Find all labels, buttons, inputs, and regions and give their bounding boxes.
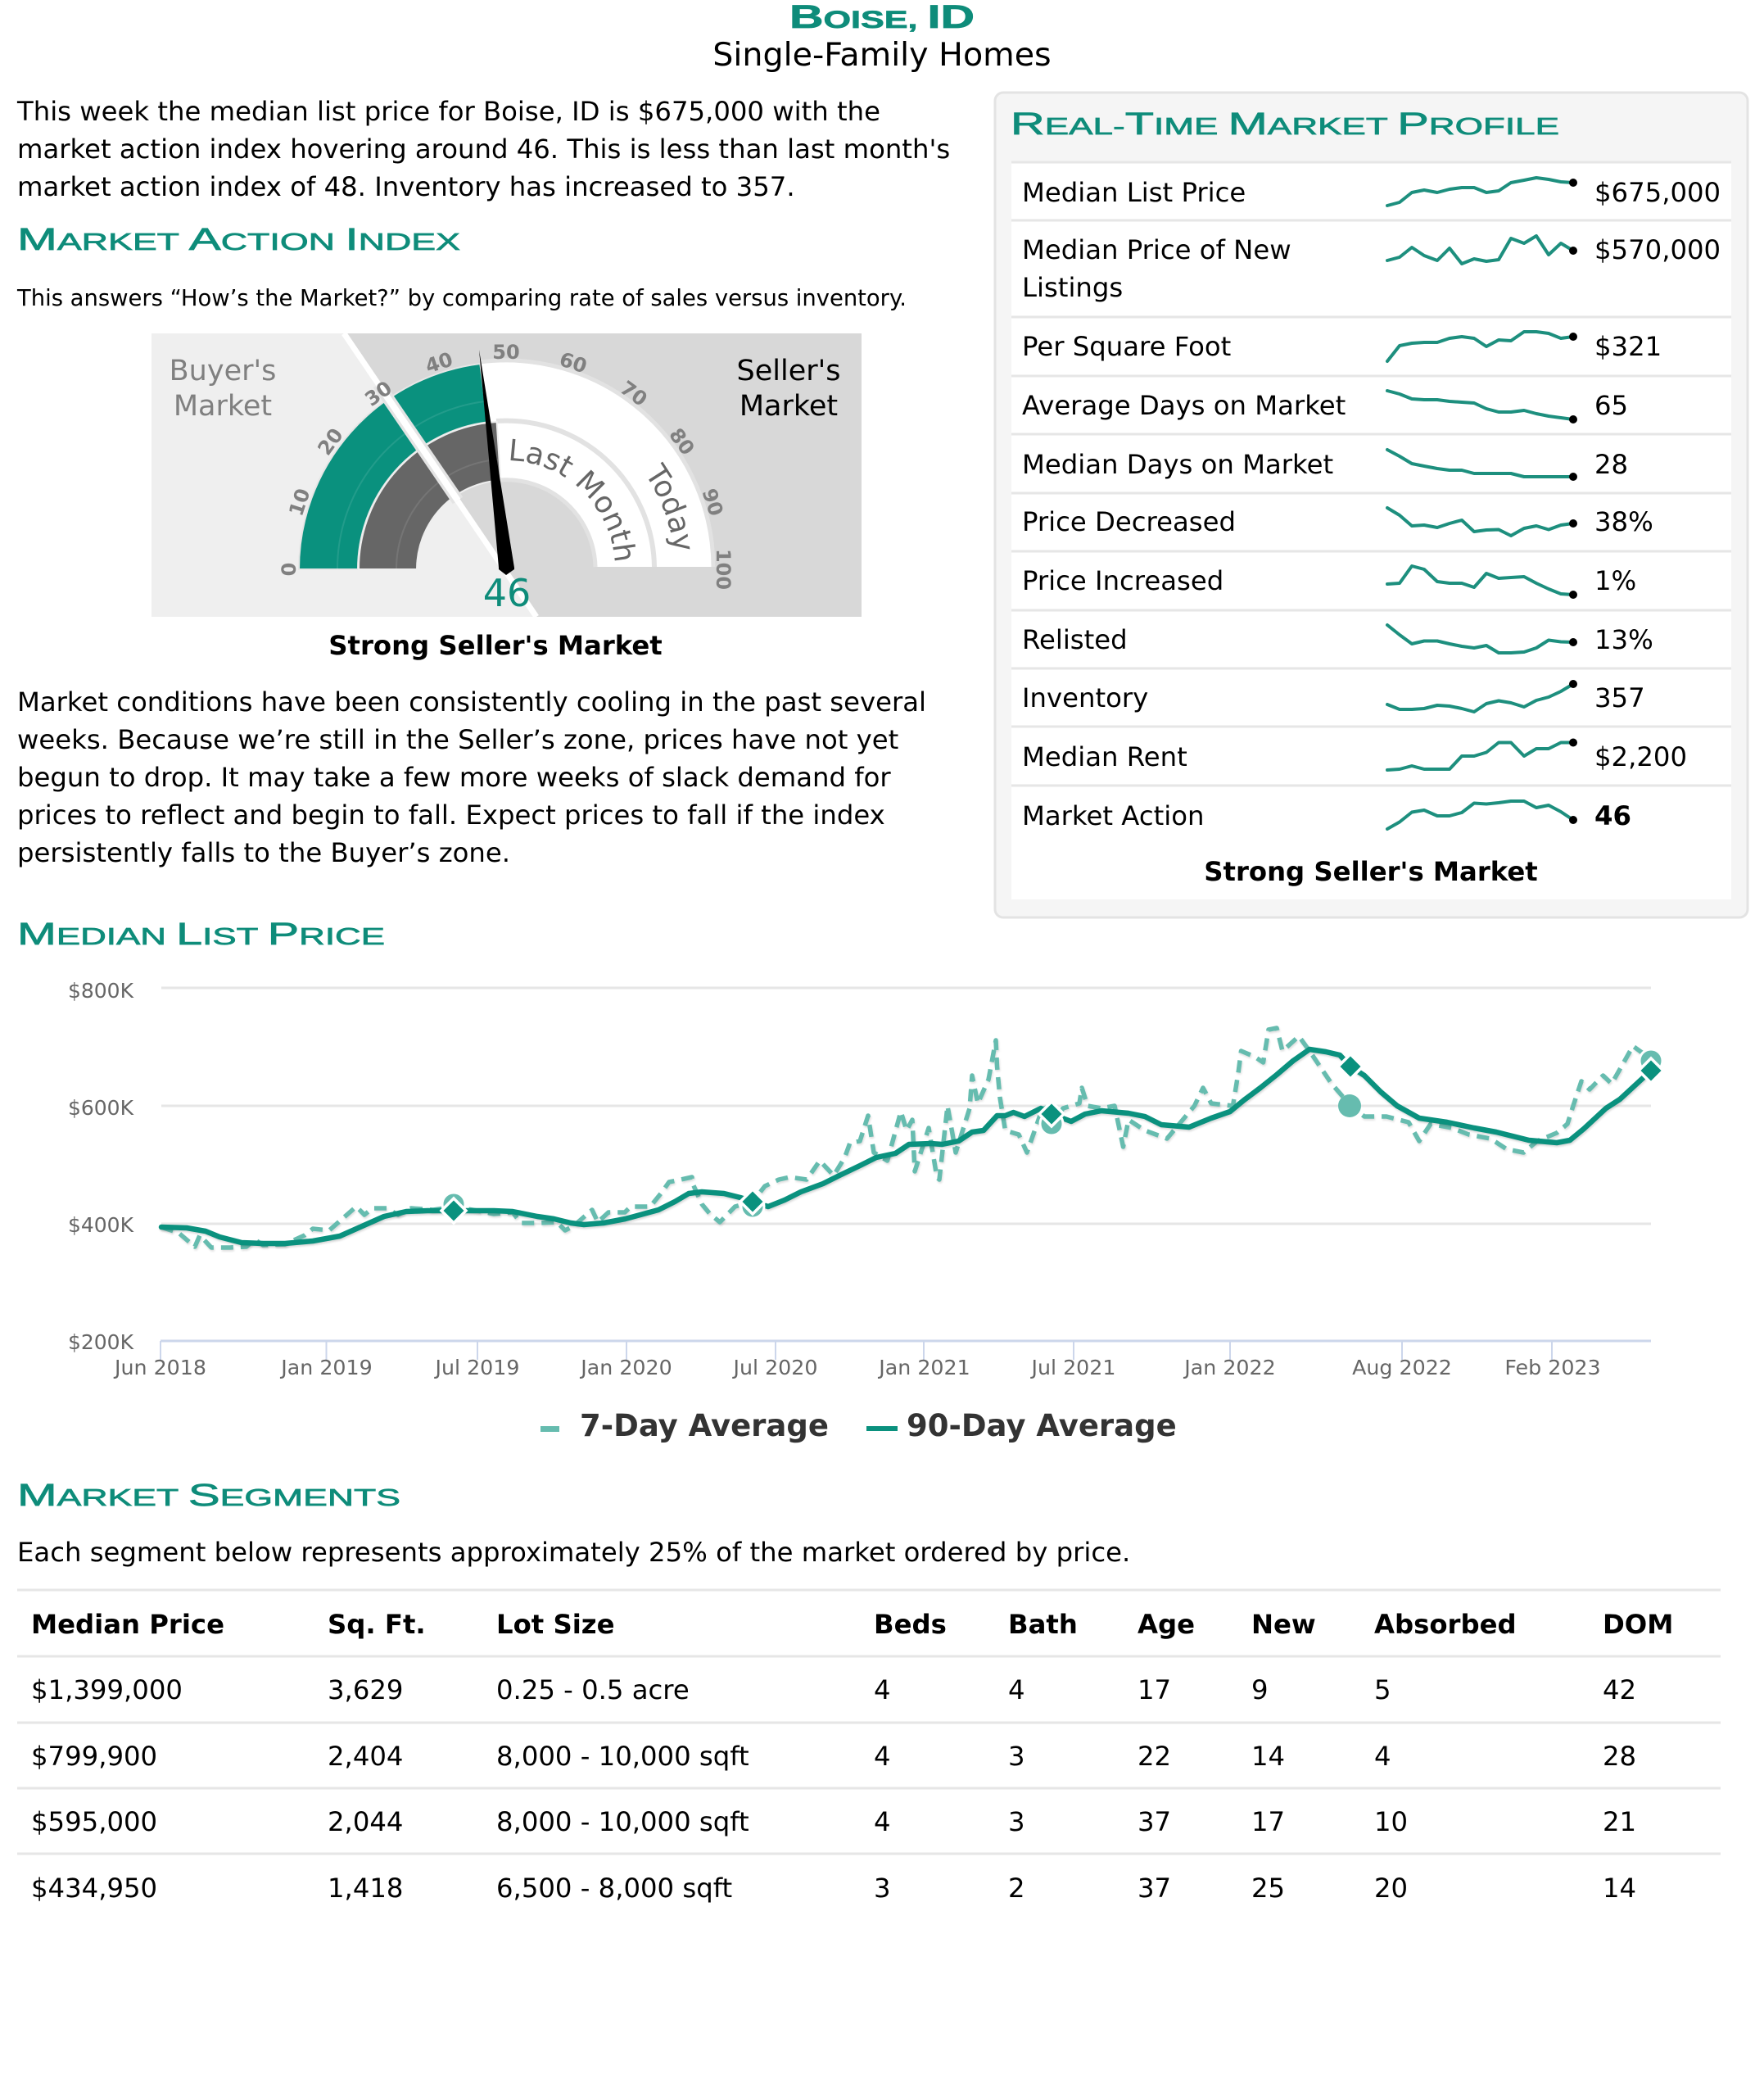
table header: Absorbed [1374,1609,1517,1640]
table row 1: 42 [1603,1674,1636,1705]
table row 1 [31,1674,1636,1705]
x axis ticks and labels: Jul 2019 [434,1356,519,1379]
table row 1: 9 [1251,1674,1269,1705]
table row 2: $799,900 [31,1741,157,1772]
chart legend: 90-Day Average [907,1408,1177,1443]
markers: 7-day circles [442,1049,1662,1218]
title: Single-Family Homes [712,36,1052,74]
row: market action: 46 [1594,800,1631,831]
table row 2: 4 [874,1741,891,1772]
gauge: scale ticks: 0 [278,563,301,576]
table row 1: $1,399,000 [31,1674,183,1705]
gauge: scale ticks: 70 [616,376,652,411]
table row 2 [31,1741,1636,1772]
gauge: band labels [511,439,690,560]
market segments description: Each segment below represents approximately 25% of the market ordered by price. [17,1537,1130,1568]
row: median days on market: 28 [1594,449,1628,480]
gauge: band labels: Today [649,462,690,549]
gauge: buyer's market label: Buyer's [170,355,276,387]
row: market action [1022,800,1631,831]
table row 3: 37 [1138,1806,1171,1837]
gauge: market action index [152,333,862,617]
gauge: scale ticks: 90 [698,486,728,519]
table row 4: 37 [1138,1873,1171,1904]
heading: market segments: M ARKET S EGMENTS [17,1479,400,1513]
gauge: seller's market label: Market [740,390,838,423]
table header: Age [1138,1609,1195,1640]
x axis ticks and labels: Jun 2018 [113,1356,206,1379]
table row 1: 5 [1374,1674,1391,1705]
row: price increased [1022,565,1636,599]
table row 3: 8,000 - 10,000 sqft [496,1806,749,1837]
panel verdict: Strong Seller's Market [1204,856,1538,887]
table row 4: 20 [1374,1873,1408,1904]
x axis ticks and labels: Jan 2020 [579,1356,672,1379]
row: average days on market [1022,390,1628,423]
row: median price of new listings: $570,000 [1594,234,1721,265]
intro paragraph: market action index of 48. Inventory has increased to 357. [17,171,795,202]
x axis ticks and labels: Jan 2022 [1183,1356,1276,1379]
markers: 90-day diamonds [441,1054,1663,1223]
row: relisted: 13% [1594,624,1653,655]
x axis ticks and labels: Jan 2021 [877,1356,970,1379]
gauge: scale ticks [278,341,735,590]
gauge: scale ticks: 40 [423,347,455,378]
x axis ticks and labels: Jul 2020 [732,1356,817,1379]
table header: Median Price [31,1609,224,1640]
x axis ticks and labels: Feb 2023 [1504,1356,1601,1379]
table row 4 [31,1873,1636,1904]
gauge: value: 46 [483,571,531,615]
heading: market action index: M ARKET A CTION INDEX [17,223,460,257]
table header: Bath [1008,1609,1078,1640]
gauge: scale ticks: 10 [284,486,314,519]
table row 3: $595,000 [31,1806,157,1837]
gauge: scale ticks: 20 [313,423,348,460]
gauge: scale ticks: 30 [360,376,396,411]
gauge: scale ticks: 50 [492,341,520,364]
panel heading: R EAL- T IME M ARKET P ROFILE [1011,107,1559,142]
table row 2: 22 [1138,1741,1171,1772]
row: price decreased [1022,506,1653,537]
series: 7-day average [161,1028,1651,1248]
table header: Lot Size [496,1609,614,1640]
gauge: scale ticks: 60 [557,347,590,378]
row: price decreased: Price Decreased [1022,506,1236,537]
gauge: buyer's market label [170,355,276,423]
table row 4: $434,950 [31,1873,157,1904]
y axis labels: $600K [68,1096,134,1120]
y axis labels [68,979,134,1354]
intro paragraph [16,96,950,202]
y axis labels: $200K [68,1330,134,1354]
table row 3: 21 [1603,1806,1636,1837]
intro paragraph: market action index hovering around 46. This is less than last month's [17,134,950,165]
x axis ticks and labels: Jul 2021 [1030,1356,1115,1379]
gauge: seller's market label: Seller's [737,355,840,387]
table row 3: 4 [874,1806,891,1837]
chart legend: 7-Day Average [580,1408,829,1443]
table row 3: 3 [1008,1806,1025,1837]
table row 1: 3,629 [328,1674,403,1705]
x axis ticks and labels: Aug 2022 [1352,1356,1452,1379]
table row 2: 4 [1374,1741,1391,1772]
table: market segments [17,1590,1721,1904]
market conditions paragraph [17,686,926,868]
table row 2: 3 [1008,1741,1025,1772]
table header: Beds [874,1609,947,1640]
row: per square foot: Per Square Foot [1022,331,1231,362]
panel: real-time market profile [995,93,1748,917]
market conditions paragraph: weeks. Because we’re still in the Seller’s zone, prices have not yet [17,724,898,755]
table row 1: 0.25 - 0.5 acre [496,1674,690,1705]
gauge: white ring [480,360,713,567]
table row 2: 14 [1251,1741,1285,1772]
y axis labels: $400K [68,1213,134,1237]
row: market action: Market Action [1022,800,1204,831]
table row 3: 2,044 [328,1806,403,1837]
row: median days on market [1022,449,1628,481]
row: median list price: Median List Price [1022,177,1246,208]
table header: Sq. Ft. [328,1609,426,1640]
x axis ticks and labels [113,1341,1601,1379]
market conditions paragraph: prices to reflect and begin to fall. Expect prices to fall if the index [17,799,885,831]
x axis ticks and labels: Jan 2019 [279,1356,373,1379]
table header: DOM [1603,1609,1673,1640]
row: average days on market: 65 [1594,390,1628,421]
row: price increased: 1% [1594,565,1636,596]
table row 2: 8,000 - 10,000 sqft [496,1741,749,1772]
gauge: seller's market label [737,355,840,423]
row: median rent: $2,200 [1594,741,1687,772]
row: median rent: Median Rent [1022,741,1187,772]
table row 1: 4 [874,1674,891,1705]
line chart: median list price [68,979,1663,1379]
table header: New [1251,1609,1316,1640]
gauge: last month band [359,422,500,569]
heading: median list price: M EDIAN L IST P RICE [17,917,385,952]
row: inventory: 357 [1594,682,1645,713]
title: B OISE, ID [789,0,975,35]
row: average days on market: Average Days on Market [1022,390,1346,421]
row: inventory: Inventory [1022,682,1148,713]
row: median rent [1022,739,1687,772]
gauge: band labels: Last Month [511,439,635,560]
row: median days on market: Median Days on Market [1022,449,1333,480]
table row 2: 28 [1603,1741,1636,1772]
table row 3 [31,1806,1636,1837]
gauge: scale ticks: 100 [712,549,735,590]
market conditions paragraph: persistently falls to the Buyer’s zone. [17,837,510,868]
gauge: today band [299,364,487,569]
y axis labels: $800K [68,979,134,1003]
table header [31,1609,1673,1640]
row: median price of new listings [1022,234,1721,303]
gauge: scale ticks: 80 [664,423,699,460]
row: median list price [1022,177,1721,208]
gauge: buyer's market label: Market [174,390,272,423]
row: relisted: Relisted [1022,624,1128,655]
series: 90-day average [161,1049,1651,1243]
market conditions paragraph: begun to drop. It may take a few more weeks of slack demand for [17,762,891,793]
gauge: needle [479,350,514,575]
table row 4: 2 [1008,1873,1025,1904]
table row 1: 17 [1138,1674,1171,1705]
table row 4: 6,500 - 8,000 sqft [496,1873,732,1904]
market action description: This answers “How’s the Market?” by comparing rate of sales versus inventory. [16,286,907,311]
table row 4: 3 [874,1873,891,1904]
row: inventory [1022,680,1645,713]
row: per square foot [1022,331,1662,362]
row: median price of new listings: Listings [1022,272,1123,303]
table row 4: 14 [1603,1873,1636,1904]
market conditions paragraph: Market conditions have been consistently cooling in the past several [17,686,926,718]
gauge verdict: Strong Seller's Market [328,630,663,661]
table row 2: 2,404 [328,1741,403,1772]
intro paragraph: This week the median list price for Boise, ID is $675,000 with the [16,96,880,127]
table row 4: 1,418 [328,1873,403,1904]
row: price decreased: 38% [1594,506,1653,537]
title [712,0,1052,74]
table row 4: 25 [1251,1873,1285,1904]
row: per square foot: $321 [1594,331,1662,362]
row: median price of new listings: Median Price of New [1022,234,1291,265]
table row 3: 10 [1374,1806,1408,1837]
table row 3: 17 [1251,1806,1285,1837]
row: median list price: $675,000 [1594,177,1721,208]
row: price increased: Price Increased [1022,565,1223,596]
table row 1: 4 [1008,1674,1025,1705]
row: relisted [1022,624,1653,655]
chart legend [541,1408,1177,1443]
